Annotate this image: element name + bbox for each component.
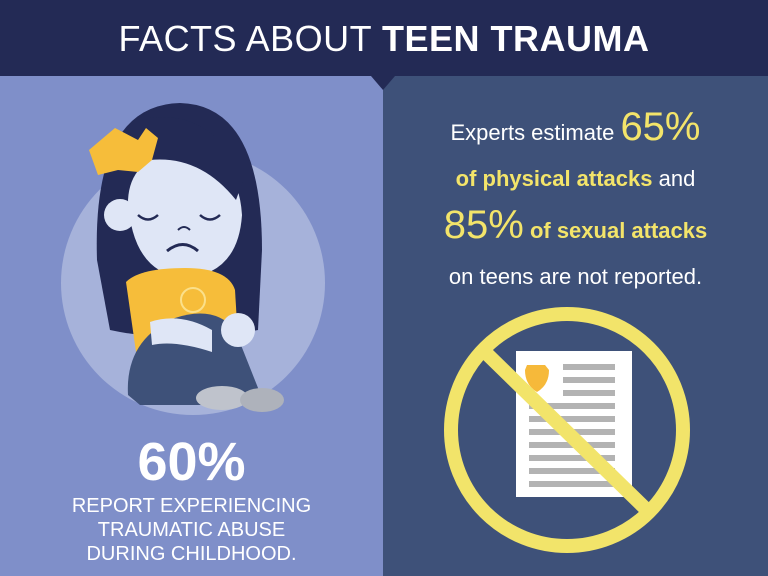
- stat: 60%: REPORT EXPERIENCING: [72, 495, 311, 517]
- text: experts estimate: of physical attacks and: [456, 166, 695, 191]
- text: experts estimate: [444, 105, 707, 289]
- stat: 60%: [72, 432, 311, 565]
- text: experts estimate: 85% of sexual attacks: [444, 203, 707, 247]
- stat: 60%: TRAUMATIC ABUSE: [98, 519, 285, 541]
- text: experts estimate: on teens are not reported.: [449, 264, 702, 289]
- text: experts estimate: Experts estimate 65%: [450, 105, 700, 149]
- icon: prohibited report: [444, 307, 690, 553]
- title: FACTS ABOUT TEEN TRAUMA: [119, 18, 649, 59]
- header pointer: [371, 76, 395, 90]
- stat: 60%: DURING CHILDHOOD.: [86, 543, 296, 565]
- panel: right: [383, 0, 768, 576]
- panel: left: [0, 0, 383, 576]
- stat: 60%: 60%: [137, 432, 246, 492]
- illustration: sad girl: [61, 103, 325, 415]
- header bar: [0, 0, 768, 76]
